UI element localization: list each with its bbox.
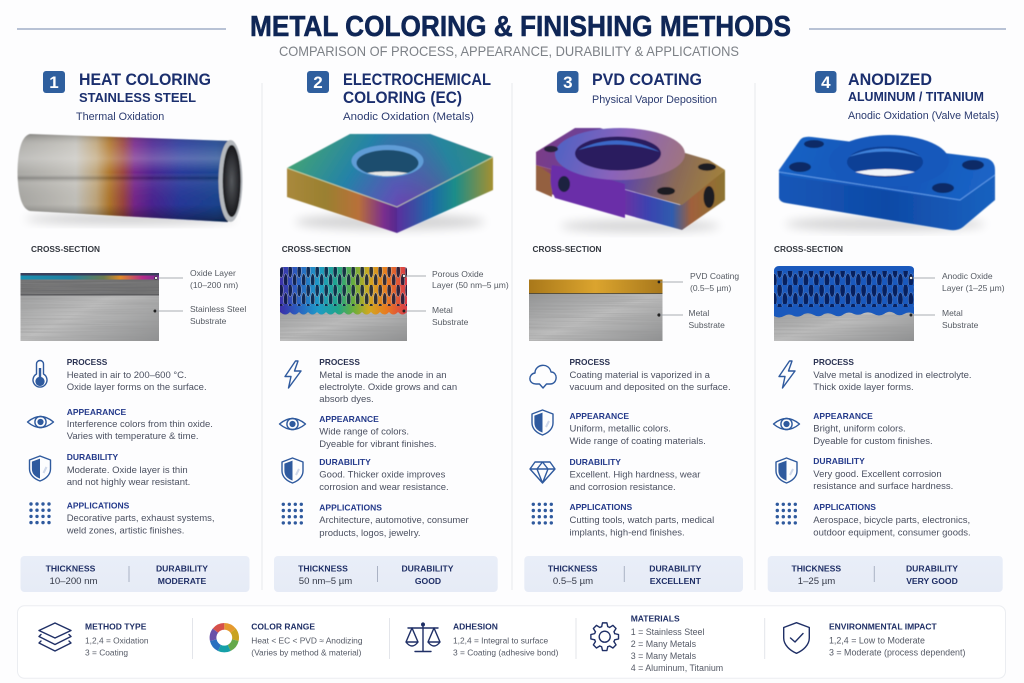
process text 1: Oxide layer forms on the surface. (67, 382, 207, 393)
method type text: METHOD TYPE (85, 622, 147, 632)
cross-section diagram 4: Metal (942, 308, 963, 318)
cross-section diagram 1: Oxide Layer (190, 268, 236, 278)
method heading 3: 3 (563, 73, 573, 92)
applications text 2 (319, 502, 469, 539)
process text 4 (813, 357, 972, 393)
appearance text 1: Varies with temperature & time. (67, 431, 199, 442)
durability text 2: Good. Thicker oxide improves (319, 470, 446, 480)
cross-section diagram 3 (529, 271, 739, 341)
icon: shield with check (784, 623, 809, 653)
method heading 3: Physical Vapor Deposition (592, 94, 717, 106)
summary bar 4 (768, 556, 1003, 592)
icon: dot grid (532, 503, 553, 525)
durability text 3: Excellent. High hardness, wear (570, 470, 700, 480)
materials text: 1 = Stainless Steel (631, 627, 704, 637)
durability text 4: resistance and surface hardness. (813, 481, 953, 492)
cross-section label 2: CROSS-SECTION (282, 244, 351, 254)
summary bar 2 (274, 556, 498, 592)
process text 1: Heated in air to 200–600 °C. (67, 370, 187, 381)
process text 4: PROCESS (813, 357, 854, 367)
product image: rainbow plate (287, 134, 493, 233)
applications text 4: outdoor equipment, consumer goods. (813, 528, 971, 538)
summary bar 2: GOOD (415, 576, 441, 586)
applications text 4: Aerospace, bicycle parts, electronics, (813, 515, 970, 526)
durability text 1: DURABILITY (67, 452, 118, 462)
cross-section diagram 1: Stainless Steel (190, 304, 246, 314)
method type text: 1,2,4 = Oxidation (85, 636, 149, 646)
panel: comparison footer (18, 606, 1006, 678)
applications text 4: APPLICATIONS (813, 502, 876, 512)
process text 2: Metal is made the anode in an (319, 370, 447, 381)
appearance text 2 (319, 414, 437, 450)
materials text (631, 614, 723, 673)
summary bar 3: EXCELLENT (650, 576, 702, 586)
subtitle: COMPARISON OF PROCESS, APPEARANCE, DURABILITY & APPLICATIONS (279, 43, 739, 59)
durability text 3: and corrosion resistance. (570, 482, 676, 493)
cross-section label 4: CROSS-SECTION (774, 244, 843, 254)
cross-section diagram 1: (10–200 nm) (190, 280, 238, 290)
cross-section diagram 1 (20, 268, 246, 341)
appearance text 3: APPEARANCE (570, 411, 629, 421)
durability text 1: and not highly wear resistant. (67, 477, 190, 488)
process text 4: Valve metal is anodized in electrolyte. (813, 370, 972, 381)
product image: heat colored tube (18, 134, 242, 224)
summary bar 3: 0.5–5 µm (553, 576, 593, 587)
appearance text 1 (67, 407, 213, 442)
color range text: Heat < EC < PVD ≈ Anodizing (251, 636, 363, 646)
process text 1 (67, 357, 207, 393)
adhesion text: 1,2,4 = Integral to surface (453, 636, 549, 646)
cross-section diagram 4: Substrate (942, 320, 979, 330)
summary bar 3 (524, 556, 743, 592)
appearance text 4 (813, 411, 933, 447)
process text 2: PROCESS (319, 357, 360, 367)
method heading 4 (815, 71, 999, 122)
cross-section diagram 2: Porous Oxide (432, 269, 484, 279)
method heading 2: Anodic Oxidation (Metals) (343, 111, 474, 123)
summary bar 4: THICKNESS (791, 563, 841, 573)
durability text 2 (319, 457, 449, 493)
applications text 3: Cutting tools, watch parts, medical (570, 515, 714, 526)
icon: shield (776, 458, 797, 483)
icon: lightning bolt (779, 361, 795, 388)
materials text: MATERIALS (631, 614, 680, 624)
summary bar 1: 10–200 nm (49, 576, 98, 587)
appearance text 3: Uniform, metallic colors. (570, 424, 671, 434)
icon: diamond (530, 462, 555, 483)
panel: heat coloring (18, 71, 250, 592)
icon: shield (30, 456, 50, 481)
durability text 2: corrosion and wear resistance. (319, 482, 449, 493)
adhesion text (453, 622, 559, 658)
method heading 1 (43, 71, 211, 123)
applications text 2: products, logos, jewelry. (319, 528, 421, 539)
adhesion text: 3 = Coating (adhesive bond) (453, 648, 559, 658)
summary bar 1 (20, 556, 250, 592)
panel: electrochemical coloring (274, 71, 509, 592)
materials text: 4 = Aluminum, Titanium (631, 663, 723, 673)
summary bar 4: VERY GOOD (906, 576, 958, 586)
summary bar 1: MODERATE (158, 576, 207, 586)
cross-section diagram 3: (0.5–5 µm) (690, 283, 731, 293)
materials text: 3 = Many Metals (631, 651, 697, 661)
color range text (251, 622, 363, 658)
applications text 1 (66, 500, 215, 536)
icon: dot grid (29, 502, 51, 524)
cross-section diagram 2 (280, 267, 509, 341)
applications text 3 (570, 502, 714, 538)
header (17, 11, 1006, 59)
applications text 1: Decorative parts, exhaust systems, (67, 513, 215, 524)
summary bar 4: DURABILITY (906, 563, 958, 573)
durability text 2: DURABILITY (319, 457, 371, 467)
icon: vapor cloud (530, 365, 556, 388)
title: METAL COLORING & FINISHING METHODS (250, 11, 791, 43)
durability text 1: Moderate. Oxide layer is thin (67, 465, 188, 476)
method type text: 3 = Coating (85, 648, 128, 658)
icon: color wheel (213, 626, 236, 649)
method heading 2 (307, 71, 491, 123)
method heading 4: ANODIZED (848, 71, 932, 89)
icon: shield (532, 410, 553, 435)
summary bar 2: THICKNESS (298, 563, 348, 573)
appearance text 3 (570, 411, 706, 447)
appearance text 4: Bright, uniform colors. (813, 424, 906, 434)
applications text 1: APPLICATIONS (67, 500, 130, 510)
cross-section diagram 3: Metal (688, 308, 709, 318)
icon: gear (591, 623, 619, 651)
method type text (85, 622, 149, 658)
method heading 3: PVD COATING (592, 71, 702, 89)
appearance text 2: APPEARANCE (319, 414, 379, 424)
icon: eye (774, 418, 800, 430)
cross-section diagram 2: Layer (50 nm–5 µm) (432, 280, 509, 290)
appearance text 2: Dyeable for vibrant finishes. (319, 439, 437, 450)
appearance text 4: Dyeable for custom finishes. (813, 436, 933, 447)
applications text 4 (813, 502, 971, 538)
color range text: (Varies by method & material) (251, 648, 362, 658)
process text 2 (319, 357, 457, 405)
method heading 2: ELECTROCHEMICAL (343, 71, 491, 89)
cross-section diagram 2: Substrate (432, 317, 469, 327)
summary bar 3: DURABILITY (649, 563, 702, 573)
applications text 1: weld zones, artistic finishes. (66, 526, 184, 536)
summary bar 3: THICKNESS (548, 563, 598, 573)
product image: pvd flange (536, 128, 725, 232)
summary bar 1: DURABILITY (156, 563, 208, 573)
environmental impact text (829, 622, 965, 658)
icon: balance scales (406, 623, 440, 652)
cross-section diagram 4: Anodic Oxide (942, 271, 993, 281)
applications text 3: implants, high-end finishes. (570, 528, 685, 538)
summary bar 4: 1–25 µm (798, 576, 835, 587)
method heading 2: COLORING (EC) (343, 89, 462, 107)
process text 1: PROCESS (67, 357, 108, 367)
process text 2: absorb dyes. (319, 394, 374, 405)
method heading 1: STAINLESS STEEL (79, 90, 196, 105)
cross-section diagram 3: Substrate (688, 320, 725, 330)
method heading 1: 1 (49, 73, 59, 92)
appearance text 1: APPEARANCE (67, 407, 127, 417)
durability text 1 (67, 452, 190, 488)
method heading 4: ALUMINUM / TITANIUM (848, 89, 984, 104)
icon: eye (280, 418, 306, 430)
materials text: 2 = Many Metals (631, 639, 697, 649)
appearance text 3: Wide range of coating materials. (570, 436, 706, 447)
icon: lightning bolt (285, 361, 301, 388)
panel: pvd coating (524, 71, 743, 592)
icon: dot grid (776, 503, 797, 525)
durability text 3: DURABILITY (570, 457, 621, 467)
cross-section label 3: CROSS-SECTION (532, 244, 602, 254)
cross-section diagram 3: PVD Coating (690, 271, 739, 281)
process text 3: PROCESS (570, 357, 611, 367)
cross-section label 1: CROSS-SECTION (31, 244, 100, 254)
icon: layers (39, 623, 71, 651)
process text 3: Coating material is vaporized in a (570, 370, 711, 381)
summary bar 2: DURABILITY (401, 563, 454, 573)
appearance text 1: Interference colors from thin oxide. (67, 419, 213, 430)
method heading 4: Anodic Oxidation (Valve Metals) (848, 110, 999, 122)
cross-section diagram 4: Layer (1–25 µm) (942, 283, 1005, 293)
appearance text 4: APPEARANCE (813, 411, 873, 421)
method heading 4: 4 (821, 73, 831, 92)
method heading 3 (557, 71, 717, 106)
applications text 2: APPLICATIONS (319, 502, 382, 512)
process text 2: electrolyte. Oxide grows and can (319, 382, 457, 393)
cross-section diagram 2: Metal (432, 305, 453, 315)
icon: eye (28, 416, 54, 428)
cross-section diagram 1: Substrate (190, 316, 227, 326)
environmental impact text: 3 = Moderate (process dependent) (829, 648, 965, 658)
method heading 1: HEAT COLORING (79, 71, 211, 89)
adhesion text: ADHESION (453, 622, 498, 632)
appearance text 2: Wide range of colors. (319, 426, 409, 438)
panel: anodized (768, 71, 1005, 592)
summary bar 1: THICKNESS (46, 563, 96, 573)
durability text 4 (813, 456, 953, 492)
icon: dot grid (282, 503, 303, 525)
durability text 3 (570, 457, 700, 493)
color range text: COLOR RANGE (251, 622, 315, 632)
durability text 4: DURABILITY (813, 456, 865, 466)
summary bar 2: 50 nm–5 µm (299, 576, 352, 587)
environmental impact text: 1,2,4 = Low to Moderate (829, 636, 925, 646)
applications text 2: Architecture, automotive, consumer (319, 515, 469, 526)
environmental impact text: ENVIRONMENTAL IMPACT (829, 622, 937, 632)
process text 3 (570, 357, 731, 393)
process text 3: vacuum and deposited on the surface. (570, 382, 731, 393)
icon: thermometer (33, 361, 47, 387)
durability text 4: Very good. Excellent corrosion (813, 469, 942, 480)
applications text 3: APPLICATIONS (570, 502, 632, 512)
cross-section diagram 4 (774, 266, 1005, 341)
method heading 1: Thermal Oxidation (76, 111, 164, 123)
icon: shield (282, 458, 303, 483)
method heading 2: 2 (313, 73, 323, 92)
product image: blue anodized flange (779, 135, 995, 231)
process text 4: Thick oxide layer forms. (813, 382, 914, 393)
